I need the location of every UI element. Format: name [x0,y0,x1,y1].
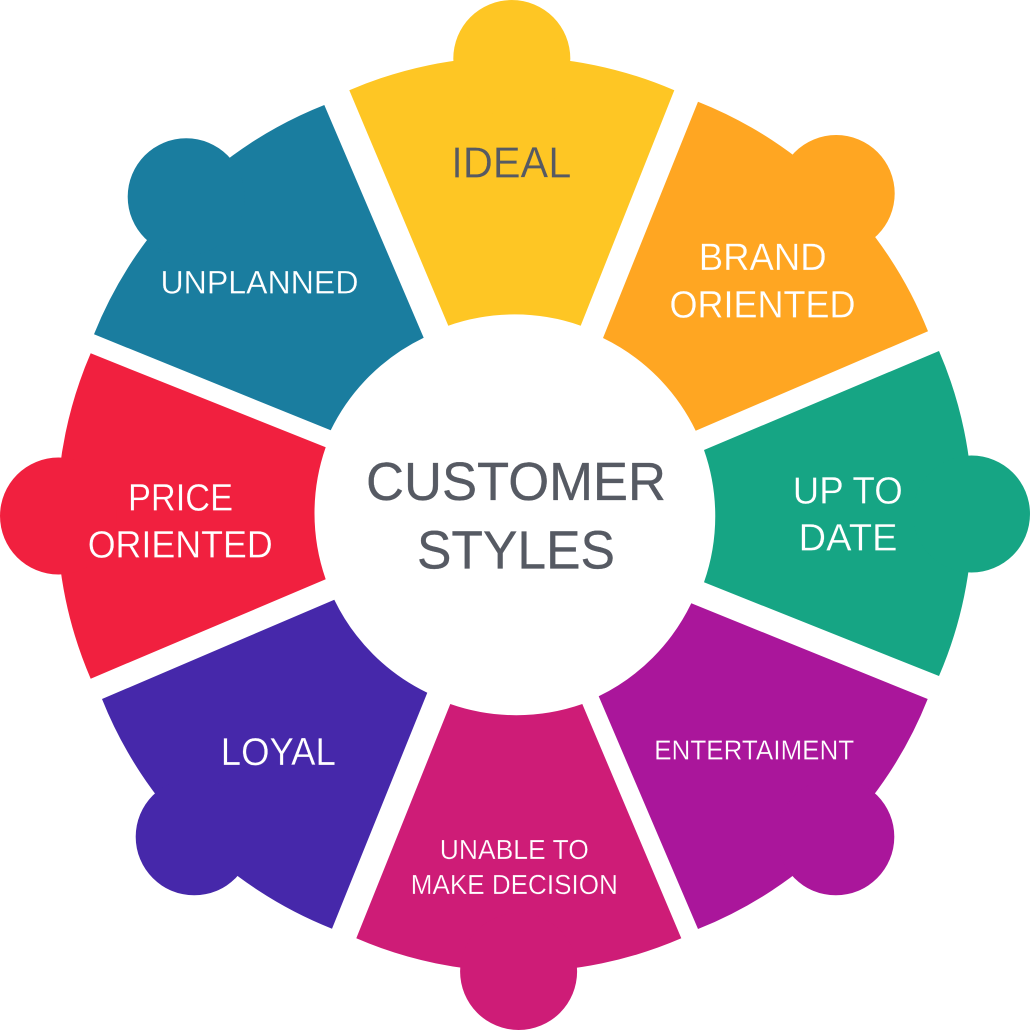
segment: brand oriented [603,102,928,431]
segment: price oriented: PRICE [128,478,233,520]
segment: up to date: DATE [798,518,898,560]
center title: CUSTOMER [366,452,666,512]
center title: STYLES [417,520,615,580]
segment: unable to make decision: MAKE DECISION [411,869,618,900]
segment: unplanned: UNPLANNED [160,264,358,300]
segment: brand oriented: BRAND [699,237,827,279]
segment: unable to make decision: UNABLE TO [440,834,589,865]
center title [366,452,666,580]
segment: up to date [704,351,1030,676]
segment: brand oriented: ORIENTED [670,284,856,326]
segment: loyal [102,600,427,929]
segment: unplanned [94,105,424,430]
segment: price oriented: ORIENTED [88,525,273,567]
segment: up to date: UP TO [793,470,903,512]
segment: unable to make decision [356,704,681,1030]
segment: price oriented [0,353,326,679]
segment: ideal: IDEAL [451,138,571,187]
segment: entertaiment: ENTERTAIMENT [654,735,854,766]
segment: ideal [349,0,674,326]
segment: entertaiment [599,603,928,929]
segment: loyal: LOYAL [221,731,336,774]
